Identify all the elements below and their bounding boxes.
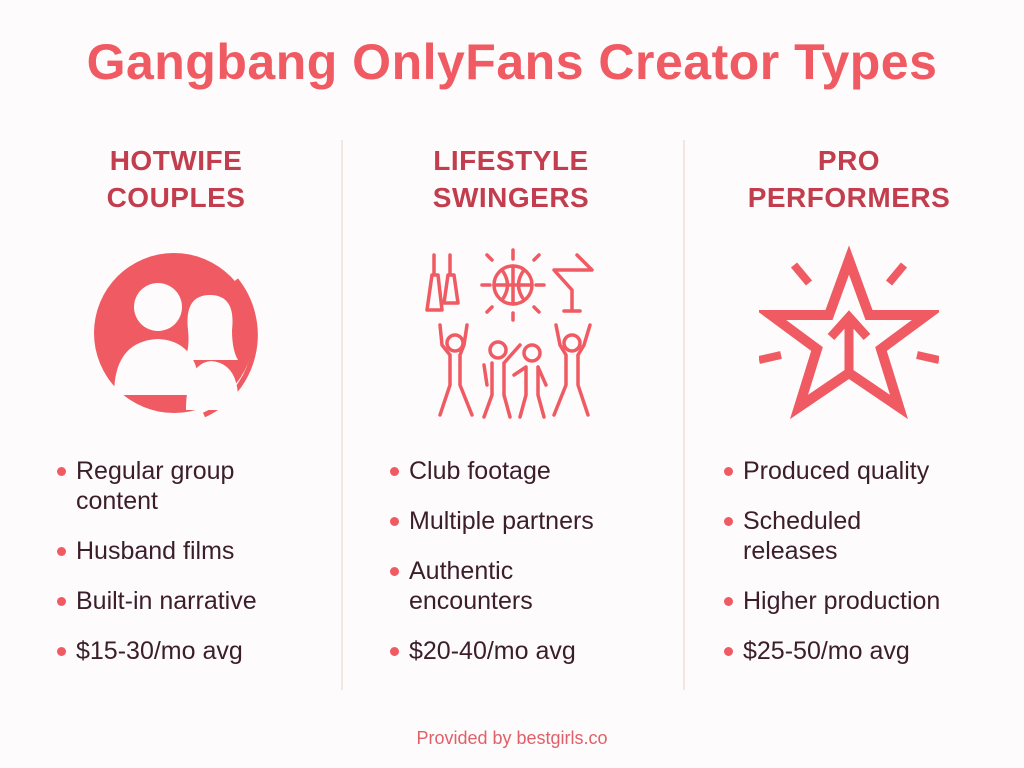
bullets: swingers: Authentic encounters [409, 557, 533, 615]
bullets: pro: Produced quality [743, 457, 929, 485]
heading: pro performers: PRO [818, 145, 880, 176]
heading: lifestyle swingers: SWINGERS [433, 182, 589, 213]
bullets: swingers: $20-40/mo avg [409, 637, 576, 665]
heading: lifestyle swingers: LIFESTYLE [433, 145, 589, 176]
bullets: pro: Scheduled releases [743, 507, 861, 565]
bullets: hotwife [57, 457, 257, 665]
bullets: hotwife: $15-30/mo avg [76, 637, 243, 665]
heading: hotwife couples: COUPLES [107, 182, 245, 213]
bullets: pro [724, 457, 940, 665]
bullets: swingers: Club footage [409, 457, 551, 485]
bullets: pro: Higher production [743, 587, 940, 615]
bullets: pro: $25-50/mo avg [743, 637, 910, 665]
bullets: swingers: Multiple partners [409, 507, 594, 535]
icon: couple [94, 253, 258, 418]
heading: hotwife couples: HOTWIFE [110, 145, 242, 176]
bullets: hotwife: Regular group content [76, 457, 234, 515]
heading: hotwife couples [107, 145, 245, 213]
heading: pro performers [748, 145, 950, 213]
bullets: hotwife: Husband films [76, 537, 234, 565]
icon: star [759, 246, 939, 419]
title: Gangbang OnlyFans Creator Types [87, 34, 937, 90]
bullets: hotwife: Built-in narrative [76, 587, 257, 615]
footer: Provided by bestgirls.co [416, 728, 608, 748]
icon: party [425, 248, 594, 419]
bullets: swingers [390, 457, 594, 665]
heading: lifestyle swingers [433, 145, 589, 213]
heading: pro performers: PERFORMERS [748, 182, 950, 213]
